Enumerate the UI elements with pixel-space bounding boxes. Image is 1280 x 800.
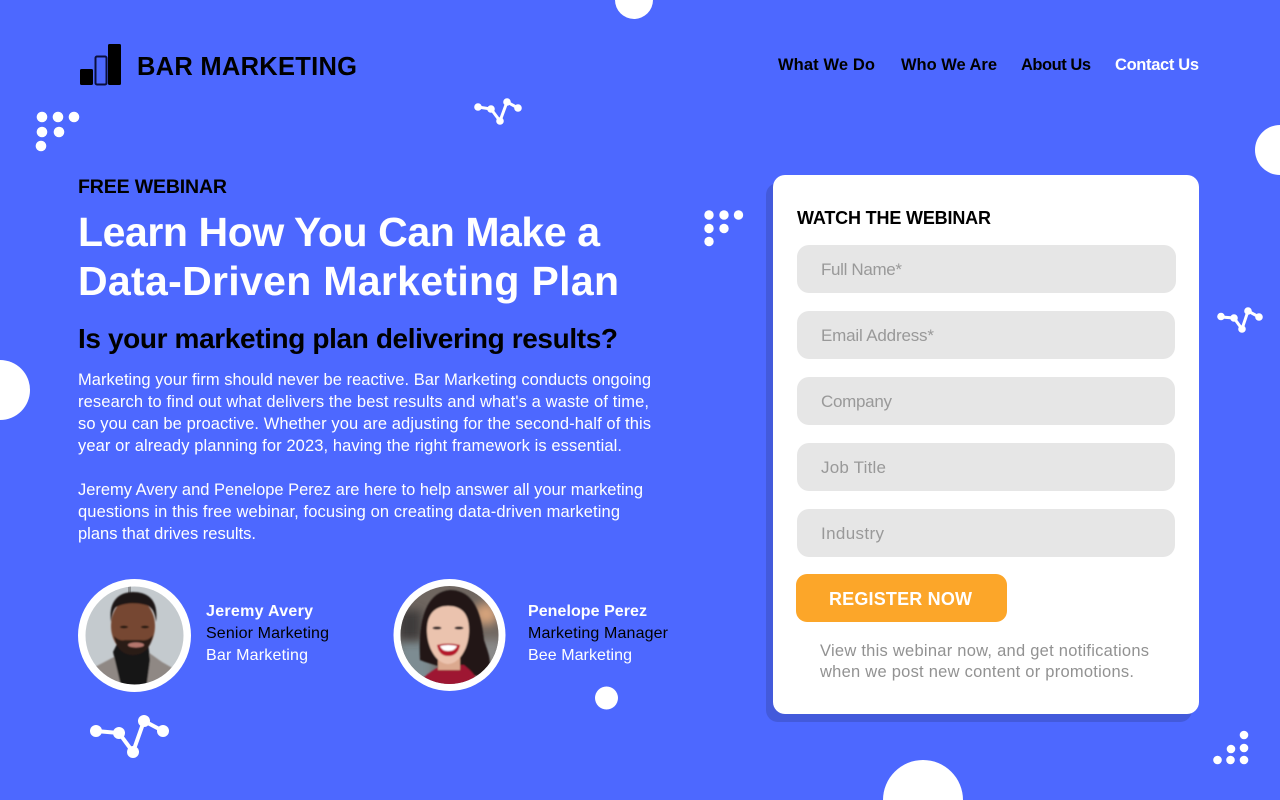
speaker: Penelope Perez [394, 579, 669, 691]
speaker details: Marketing Manager [528, 625, 669, 642]
navigation: Who We Are [901, 56, 997, 74]
body text: so you can be proactive. Whether you are adjusting for the second-half of this [78, 415, 651, 433]
title: Learn How You Can Make a [78, 209, 601, 255]
button: register now [796, 574, 1007, 622]
body text [78, 371, 651, 543]
logo [80, 44, 357, 85]
body text: year or already planning for 2023, having the right framework is essential. [78, 437, 622, 455]
card shadow [766, 183, 1192, 722]
eyebrow: FREE WEBINAR [78, 176, 227, 198]
field: industry [797, 509, 1175, 557]
dot cluster: middle [704, 210, 743, 246]
icon: network line bottom [90, 715, 169, 758]
icon: network line top [474, 98, 522, 125]
body text: questions in this free webinar, focusing on creating data-driven marketing [78, 503, 620, 521]
navigation: About Us [1021, 56, 1091, 74]
body text: Jeremy Avery and Penelope Perez are here to help answer all your marketing [78, 481, 643, 499]
field: job title: Job Title [821, 458, 886, 477]
body text: Marketing your firm should never be reactive. Bar Marketing conducts ongoing [78, 371, 651, 389]
speaker details: Jeremy Avery [206, 603, 313, 620]
body text: research to find out what delivers the best results and what's a waste of time, [78, 393, 649, 411]
form note [819, 642, 1149, 681]
field: full name [797, 245, 1176, 293]
brand name: BAR MARKETING [137, 53, 357, 81]
title: Data-Driven Marketing Plan [78, 258, 619, 304]
form note: View this webinar now, and get notifications [820, 642, 1149, 660]
speaker details: Bee Marketing [528, 647, 632, 664]
icon: bar chart logo [80, 44, 121, 85]
field: industry: Industry [821, 524, 884, 543]
field: email: Email Address* [821, 326, 934, 345]
dot cluster: bottom right [1213, 731, 1248, 764]
form note: when we post new content or promotions. [819, 663, 1134, 681]
field: full name: Full Name* [821, 260, 902, 279]
speaker details: Bar Marketing [206, 647, 308, 664]
field: email [797, 311, 1175, 359]
dot cluster: top left [36, 112, 79, 151]
speaker details: Penelope Perez [528, 603, 647, 620]
button: register now: REGISTER NOW [829, 589, 972, 609]
form heading: WATCH THE WEBINAR [797, 208, 991, 228]
portrait: Penelope Perez [394, 579, 506, 691]
portrait: Jeremy Avery [78, 579, 191, 692]
subheading: Is your marketing plan delivering results? [78, 323, 618, 354]
speaker details [528, 603, 669, 664]
navigation: What We Do [778, 56, 875, 74]
speaker details [206, 603, 329, 664]
panel: registration form [766, 175, 1199, 722]
icon: network line right [1217, 307, 1263, 333]
navigation: Contact Us [1115, 56, 1199, 74]
field: job title [797, 443, 1175, 491]
field: company [797, 377, 1175, 425]
navigation [778, 56, 1199, 74]
speaker: Jeremy Avery [78, 579, 329, 692]
card [773, 175, 1199, 714]
speaker details: Senior Marketing [206, 625, 329, 642]
field: company: Company [821, 392, 892, 411]
title [78, 209, 619, 304]
body text: plans that drives results. [78, 525, 256, 543]
